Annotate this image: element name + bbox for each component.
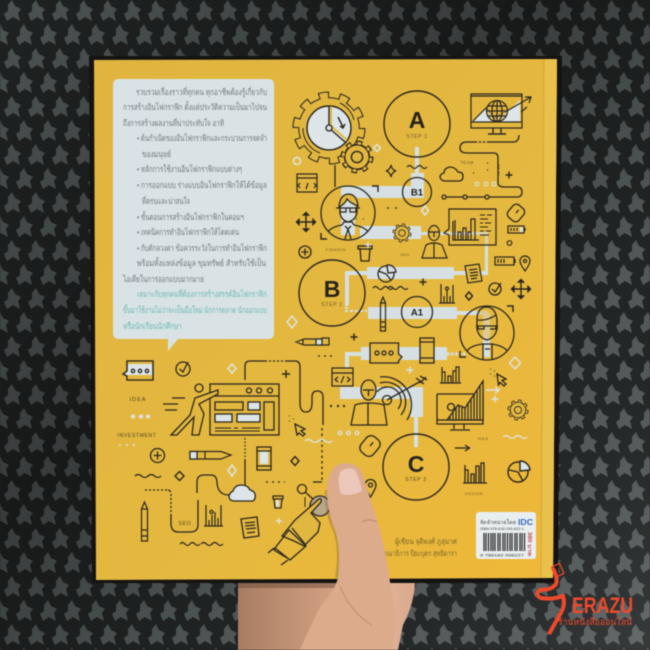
label: seo lower: SEO	[178, 521, 192, 527]
icon: pie top	[378, 265, 396, 282]
light dots	[294, 144, 496, 215]
sticker: barcode and price: IDC	[518, 518, 533, 527]
icon: light star lower	[228, 465, 236, 476]
book back cover	[89, 56, 562, 583]
person: finance	[321, 186, 378, 240]
serpentine path with nodes	[442, 135, 522, 199]
circle B1: B1	[411, 188, 424, 198]
dashes	[318, 355, 335, 357]
icon: cursor right	[490, 369, 506, 386]
label: finance: FINANCE	[326, 247, 346, 252]
icon: cloud lower	[229, 485, 255, 501]
squiggles lower	[135, 474, 223, 546]
circle A step 1: A	[409, 107, 425, 133]
description text: • เทคนิคการทำอินโฟกราฟิกให้โดดเด่น	[137, 227, 239, 237]
icon: monitor rising chart	[437, 381, 483, 430]
icon: move arrows right	[512, 280, 530, 298]
icon: arrow right	[455, 445, 470, 451]
icon: document	[465, 264, 482, 283]
light dots center	[338, 431, 359, 435]
icon: diamond	[466, 292, 472, 300]
author credits	[377, 537, 457, 558]
description text: ที่ครบและน่าสนใจ	[142, 195, 190, 206]
sticker: barcode and price: ISBN 978-616-200-822-1	[480, 527, 524, 531]
sticker: barcode and price: 380 บาท	[526, 532, 532, 557]
description text: • ต้นกำเนิดของอินโฟกราฟิกและกระบวนการจดจำ	[137, 133, 267, 143]
icon: small gear	[343, 143, 371, 171]
squiggle below pie and plus	[373, 278, 426, 290]
icon: mouse top	[505, 202, 527, 224]
icon: pie lower	[508, 461, 530, 482]
icon: bar chart pin	[439, 284, 455, 303]
icon: globe monitor	[471, 94, 531, 134]
light dots left	[119, 414, 150, 446]
description text: การสร้างอินโฟกราฟิก ตั้งแต่ประวัติความเป็นมาไปจน	[123, 100, 267, 112]
icon: check circle	[489, 283, 501, 295]
small marks	[335, 163, 512, 208]
label: design: DESIGN	[465, 491, 483, 496]
long winding line	[245, 361, 345, 482]
description text: • ขั้นตอนการสร้างอินโฟกราฟิกในคอมฯ	[137, 210, 244, 222]
label: seo: SEO	[400, 252, 410, 257]
circle C step 3	[383, 434, 449, 500]
author credits: บรรณาธิการ ปิยะบุตร สุทธิดารา	[377, 549, 457, 558]
description text: • หลักการใช้งานอินโฟกราฟิกแบบต่างๆ	[137, 164, 242, 174]
icon: chat box	[370, 343, 402, 363]
description text: ของมนุษย์	[142, 149, 171, 160]
icon: bar chart lower	[204, 505, 223, 526]
description text: ถึงการสร้างผลงานที่น่าประทับใจ อาทิ	[123, 117, 224, 128]
description text: เหมาะกับทุกคนที่ต้องการสร้างสรรค์อินโฟกราฟิก	[137, 288, 267, 300]
star and plus light	[287, 316, 520, 402]
icon: check circle left	[176, 362, 190, 376]
winding line to cloud	[143, 438, 245, 532]
squiggle light right	[503, 436, 527, 438]
description text: รวบรวมเรื่องราวที่ทุกคน ทุกอาชีพต้องรู้เกี่ยวกับ	[136, 86, 267, 98]
dashes near hand	[266, 481, 285, 483]
icon: code window top	[297, 174, 317, 192]
cursor lower	[289, 416, 305, 436]
icon: gear right	[509, 401, 527, 419]
figure pushing	[163, 384, 218, 435]
circle B step 2: STEP 2	[321, 302, 343, 308]
circle A1: A1	[411, 308, 424, 318]
hand holding book	[238, 463, 415, 650]
description text: พร้อมทั้งแหล่งข้อมูล ขุมทรัพย์ สำหรับใช้เป็น	[137, 256, 266, 269]
icon: vertical pencil	[380, 297, 386, 331]
label: idea right: IDEA	[478, 436, 488, 441]
icon: mouse bottom	[357, 433, 383, 459]
sticker: barcode and price: 9 786162 006227	[480, 552, 525, 558]
icon: code window center	[332, 368, 353, 386]
label: idea: IDEA	[129, 397, 147, 403]
sticker: barcode and price: จัดจำหน่ายโดย	[480, 519, 516, 526]
icon: chat left	[123, 361, 153, 380]
circle C step 3: STEP 3	[405, 477, 427, 483]
chart board	[444, 209, 496, 245]
icon: cup lower	[273, 496, 283, 508]
icon: window block pushed by figure	[163, 384, 279, 435]
icon: cloud	[440, 167, 463, 181]
circle A step 1: STEP 1	[406, 134, 428, 140]
icon: hand pressing button	[268, 484, 330, 565]
description text	[122, 86, 267, 331]
circle A1	[402, 296, 432, 328]
icon: bar chart center	[440, 367, 461, 383]
author credits: ผู้เขียน จุติพงศ์ ภูสุมาศ	[395, 537, 457, 546]
description text: ไอเดียในการออกแบบมากมาย	[122, 274, 204, 284]
plus light	[276, 518, 282, 524]
icon: gear seo	[394, 225, 410, 241]
icon: location pin top	[520, 256, 530, 271]
person: seo analyst	[422, 226, 447, 258]
panel: speech bubble description	[113, 79, 274, 351]
squiggle light lower	[305, 440, 332, 442]
icon: battery	[495, 257, 515, 265]
icon: phone lower	[257, 447, 271, 470]
circle A step 1	[384, 91, 450, 157]
icon: pencil lower	[190, 452, 231, 459]
circle B step 2: B	[324, 276, 340, 302]
flow connectors	[340, 147, 488, 447]
icon: light star	[228, 364, 236, 373]
icon: plus circle	[299, 246, 311, 258]
icon: move arrows left	[296, 212, 316, 232]
icon: diamonds lower	[175, 456, 299, 480]
icon: clock gear	[296, 95, 362, 161]
label: investment: INVESTMENT	[117, 433, 157, 439]
icon: horizontal pencil	[296, 338, 329, 345]
icon: location pin lower	[365, 480, 376, 497]
circle C step 3: C	[408, 451, 424, 477]
description text: • กับดักลวงตา ข้อควรระวังในการทำอินโฟกราฟิก	[137, 243, 267, 253]
description text: หรือนักเรียนนักศึกษา	[123, 321, 182, 331]
plus dark center	[350, 334, 358, 340]
description text: ขึ้นมาใช้งานไม่ว่าจะเป็นมือใหม่ นักการตลาด นักออกแบบ	[123, 303, 267, 315]
logo: berazu: ERAZU	[572, 593, 633, 618]
circle B1	[402, 178, 432, 206]
icon: phone	[420, 338, 434, 363]
circle B step 2	[299, 260, 365, 326]
icon: vertical pencil lower	[142, 502, 148, 541]
icon: cup	[358, 242, 372, 261]
icon: plus circle lower	[150, 448, 164, 462]
icon: battery small	[508, 226, 525, 233]
logo: berazu: ร้านหนังสือออนไลน์	[558, 616, 632, 628]
label: team: TEAM	[460, 160, 474, 165]
logo: berazu	[537, 563, 633, 634]
description text: • การออกแบบ ร่างแบบอินโฟกราฟิกให้ได้ข้อมูล	[137, 180, 267, 191]
icon: bar chart design	[463, 463, 487, 483]
person: reader	[460, 306, 514, 360]
barcode	[484, 533, 524, 551]
icon: document lower	[241, 517, 259, 538]
sticker: barcode and price	[476, 512, 536, 559]
icon: ring	[507, 241, 512, 245]
person with target	[351, 376, 427, 425]
